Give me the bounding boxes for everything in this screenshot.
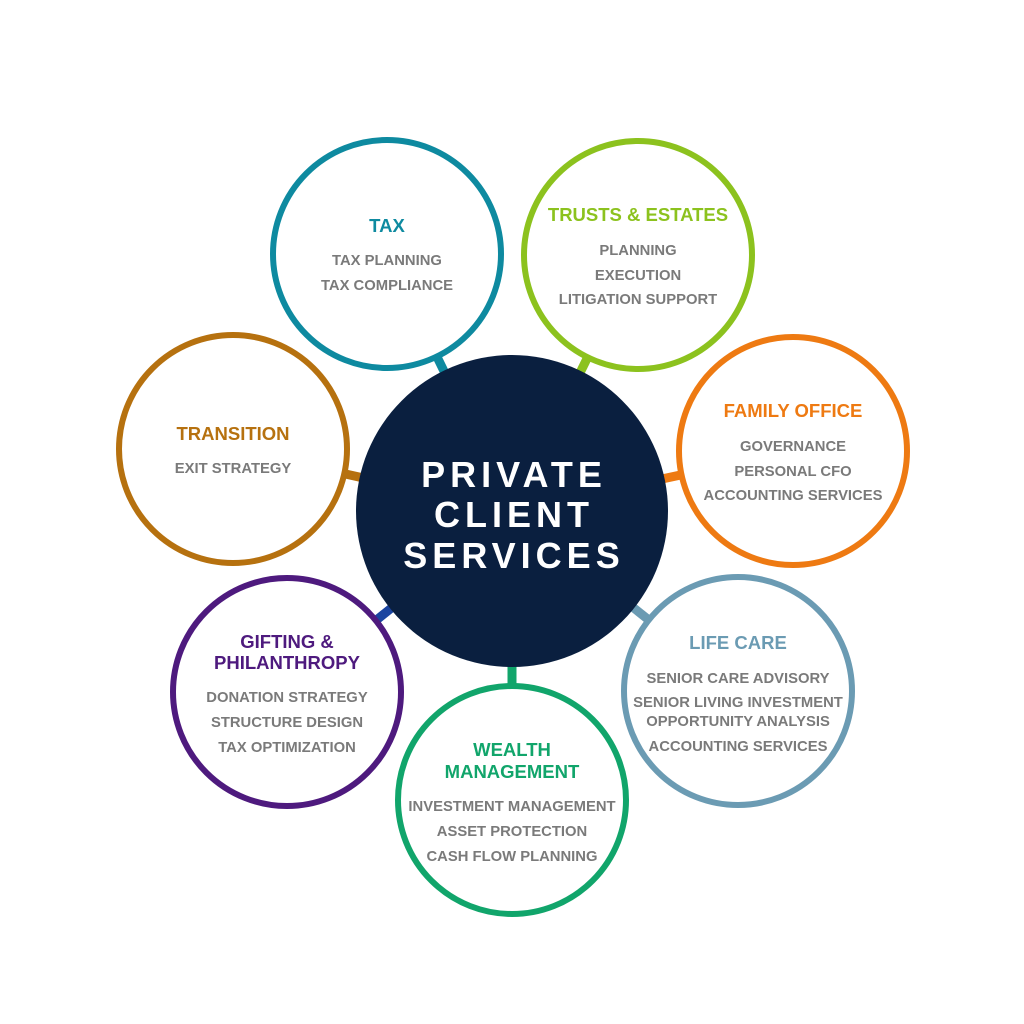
- panel: trusts & estates: EXECUTION: [595, 268, 681, 284]
- panel: wealth management: INVESTMENT MANAGEMENT: [408, 799, 616, 815]
- panel: wealth management: WEALTH: [473, 739, 551, 760]
- panel: wealth management: ASSET PROTECTION: [437, 824, 587, 840]
- center: private client services: SERVICES: [403, 535, 625, 576]
- panel: trusts & estates: LITIGATION SUPPORT: [559, 292, 717, 308]
- panel: trusts & estates: PLANNING: [599, 243, 677, 259]
- panel: family office: [679, 337, 907, 565]
- panel: gifting & philanthropy: STRUCTURE DESIGN: [211, 715, 363, 731]
- panel: life care: SENIOR CARE ADVISORY: [646, 671, 830, 687]
- panel: wealth management: [398, 686, 626, 914]
- panel: family office: ACCOUNTING SERVICES: [704, 488, 883, 504]
- panel: gifting & philanthropy: GIFTING &: [240, 631, 334, 652]
- panel: gifting & philanthropy: PHILANTHROPY: [214, 652, 361, 673]
- panel: life care: SENIOR LIVING INVESTMENT: [633, 695, 843, 711]
- center: private client services: CLIENT: [434, 494, 594, 535]
- panel: gifting & philanthropy: [173, 578, 401, 806]
- panel: wealth management: CASH FLOW PLANNING: [427, 849, 597, 865]
- panel: family office: FAMILY OFFICE: [724, 400, 862, 421]
- panel: tax: TAX COMPLIANCE: [321, 278, 453, 294]
- center: private client services: PRIVATE: [421, 454, 607, 495]
- panel: tax: TAX: [369, 215, 405, 236]
- panel: tax: [273, 140, 501, 368]
- panel: trusts & estates: TRUSTS & ESTATES: [548, 204, 728, 225]
- panel: life care: ACCOUNTING SERVICES: [649, 739, 828, 755]
- panel: gifting & philanthropy: TAX OPTIMIZATION: [218, 740, 356, 756]
- panel: family office: GOVERNANCE: [740, 439, 846, 455]
- panel: family office: PERSONAL CFO: [734, 464, 852, 480]
- panel: transition: EXIT STRATEGY: [175, 461, 291, 477]
- connectors: [233, 254, 793, 800]
- panel: trusts & estates: [524, 141, 752, 369]
- panel: life care: [624, 577, 852, 805]
- panel: transition: [119, 335, 347, 563]
- panel: tax: TAX PLANNING: [332, 253, 442, 269]
- panel: transition: TRANSITION: [176, 423, 290, 444]
- panel: wealth management: MANAGEMENT: [445, 761, 580, 782]
- center: private client services: [356, 355, 668, 667]
- panel: life care: LIFE CARE: [689, 632, 787, 653]
- panel: gifting & philanthropy: DONATION STRATEGY: [206, 690, 368, 706]
- panel: life care: OPPORTUNITY ANALYSIS: [646, 714, 830, 730]
